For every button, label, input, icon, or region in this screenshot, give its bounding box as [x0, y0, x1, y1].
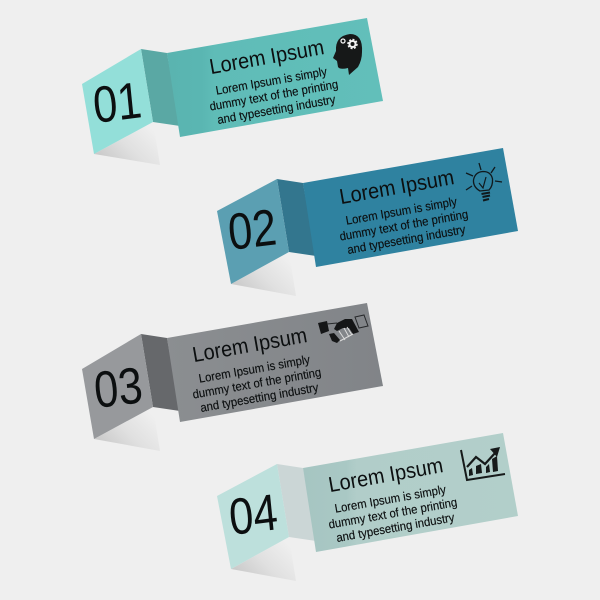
icon: head with gears	[333, 34, 362, 75]
icon: handshake	[318, 315, 368, 343]
ribbon 02	[303, 148, 518, 267]
panel: step 04	[217, 433, 518, 581]
fold 04	[277, 464, 316, 541]
body 04: Lorem Ipsum is simply	[334, 483, 447, 516]
shadow 03	[94, 407, 160, 451]
icon: growth chart	[461, 447, 505, 480]
body 01: and typesetting industry	[216, 93, 337, 127]
fold 01	[141, 49, 180, 126]
heading 01: Lorem Ipsum	[208, 36, 326, 79]
body 02: dummy text of the printing	[339, 208, 469, 244]
ribbon 03	[167, 303, 383, 422]
body 02: and typesetting industry	[346, 223, 467, 257]
number tab 04	[217, 464, 289, 569]
body 01	[206, 63, 342, 128]
body 04	[325, 481, 461, 546]
body 02	[336, 193, 472, 258]
number tab 02	[217, 179, 289, 284]
body 03	[189, 351, 325, 416]
ribbon 04	[303, 433, 518, 552]
panel: step 01	[82, 18, 383, 165]
body 03: Lorem Ipsum is simply	[198, 353, 311, 386]
number tab 03	[82, 334, 153, 439]
fold 03	[141, 334, 180, 411]
number tab 01	[82, 49, 153, 154]
heading 04: Lorem Ipsum	[327, 454, 445, 497]
body 03: dummy text of the printing	[192, 366, 322, 402]
icon: light bulb	[466, 163, 502, 200]
body 03: and typesetting industry	[199, 381, 320, 415]
fold 02	[277, 179, 316, 256]
body 02: Lorem Ipsum is simply	[345, 195, 458, 228]
body 01: Lorem Ipsum is simply	[215, 65, 328, 98]
panel: step 02	[217, 148, 518, 296]
body 04: dummy text of the printing	[328, 496, 458, 532]
body 04: and typesetting industry	[335, 511, 456, 545]
number 01: 01	[91, 72, 144, 135]
shadow 02	[231, 252, 296, 296]
shadow 04	[231, 537, 296, 581]
ribbon 01	[167, 18, 383, 137]
heading 03: Lorem Ipsum	[191, 324, 309, 367]
number 04: 04	[227, 484, 280, 547]
panel: step 03	[82, 303, 383, 451]
heading 02: Lorem Ipsum	[338, 166, 456, 209]
number 03: 03	[92, 357, 145, 420]
body 01: dummy text of the printing	[209, 78, 339, 114]
shadow 01	[94, 122, 160, 165]
number 02: 02	[226, 199, 279, 262]
